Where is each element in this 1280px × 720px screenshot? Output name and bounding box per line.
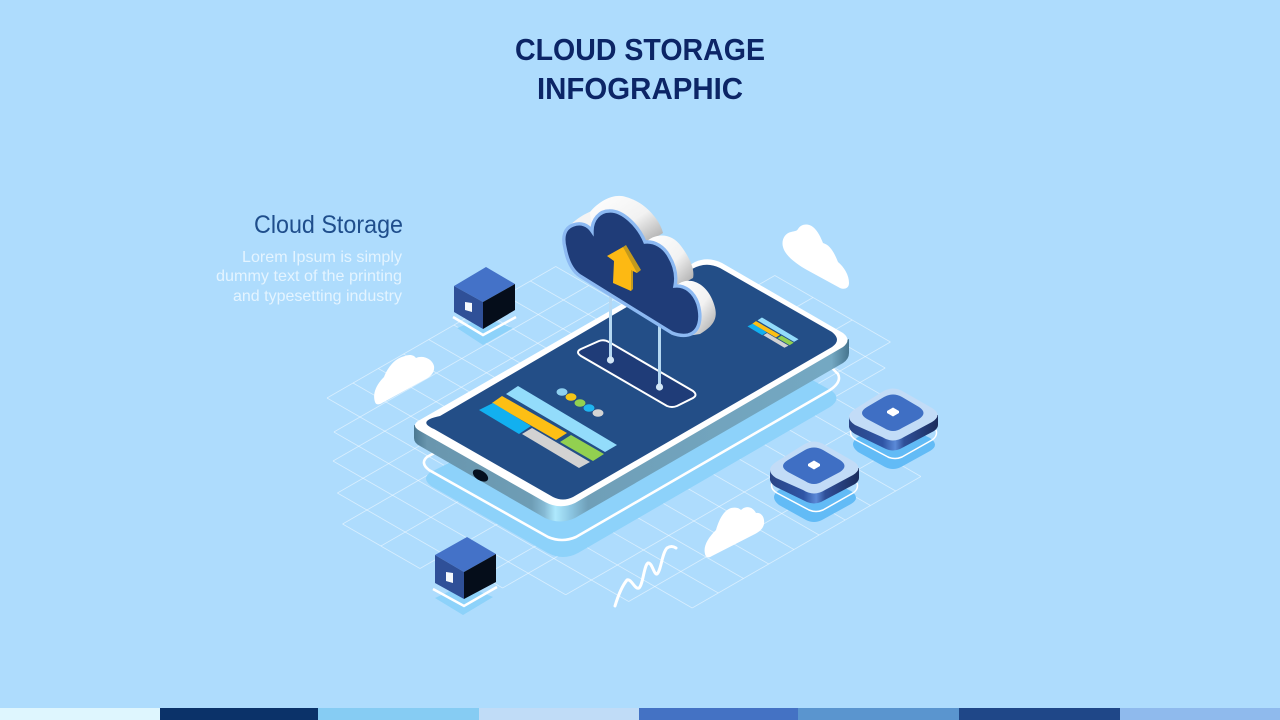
large bar chart — [479, 386, 617, 468]
phone screen — [426, 265, 837, 500]
phone ground shadow — [426, 362, 837, 557]
cube: lower left — [433, 537, 497, 615]
callout: cloud storage — [216, 211, 403, 305]
3D cloud with upload arrow — [564, 196, 716, 336]
status dots — [556, 388, 604, 417]
cube: upper left — [453, 267, 516, 345]
storage block: right — [849, 388, 938, 469]
connector poles — [607, 295, 663, 391]
smartphone — [414, 259, 849, 522]
title: CLOUD STORAGE — [515, 32, 765, 67]
phone bezel — [415, 259, 848, 506]
phone side edge — [414, 339, 849, 522]
phone ground outline — [424, 368, 839, 540]
flat cloud: top right — [782, 225, 849, 289]
squiggle line — [615, 546, 676, 606]
callout body text: Lorem Ipsum is simply — [242, 249, 402, 266]
cloud face — [564, 211, 700, 335]
callout body text: and typesetting industry — [233, 288, 402, 305]
title: INFOGRAPHIC — [537, 71, 743, 106]
storage block: lower — [770, 442, 859, 522]
callout body text — [216, 249, 402, 305]
callout body text: dummy text of the printing — [216, 268, 402, 285]
bottom colour strip — [0, 708, 1280, 720]
upload slot — [578, 340, 696, 407]
upload arrow — [607, 245, 641, 291]
flat cloud: bottom — [705, 507, 764, 557]
charging port — [471, 467, 490, 484]
callout heading: Cloud Storage — [254, 211, 403, 239]
small bar chart — [747, 317, 799, 348]
title — [515, 32, 765, 106]
cloud extruded lobes — [570, 196, 716, 336]
flat cloud: left — [374, 355, 434, 404]
